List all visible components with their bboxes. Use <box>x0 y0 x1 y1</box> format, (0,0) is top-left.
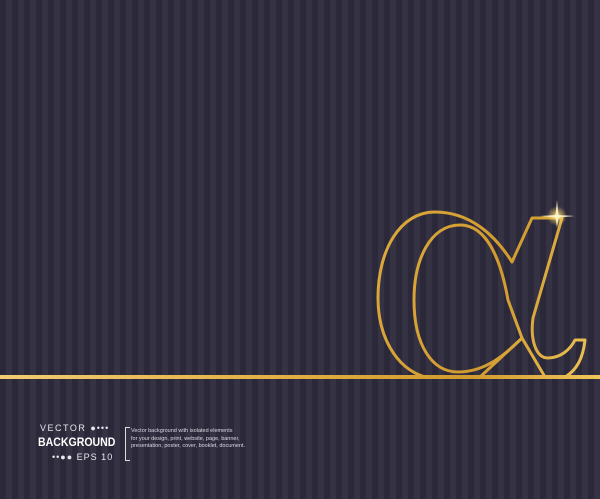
baseline gold line <box>0 375 600 379</box>
description: Vector background with isolated elements <box>131 428 233 434</box>
logo text block <box>38 423 245 462</box>
BACKGROUND label: BACKGROUND <box>38 435 115 449</box>
bracket <box>125 427 130 461</box>
description: for your design, print, website, page, banner, <box>131 436 240 442</box>
VECTOR label: VECTOR ●••• <box>40 423 109 433</box>
sparkle <box>540 200 575 228</box>
description <box>131 428 245 449</box>
description: presentation, poster, cover, booklet, document. <box>131 443 245 449</box>
alpha inner contour <box>414 225 522 372</box>
EPS 10 label: ••●● EPS 10 <box>52 452 113 462</box>
alpha outer contour <box>378 212 585 377</box>
alpha peak <box>480 338 545 377</box>
